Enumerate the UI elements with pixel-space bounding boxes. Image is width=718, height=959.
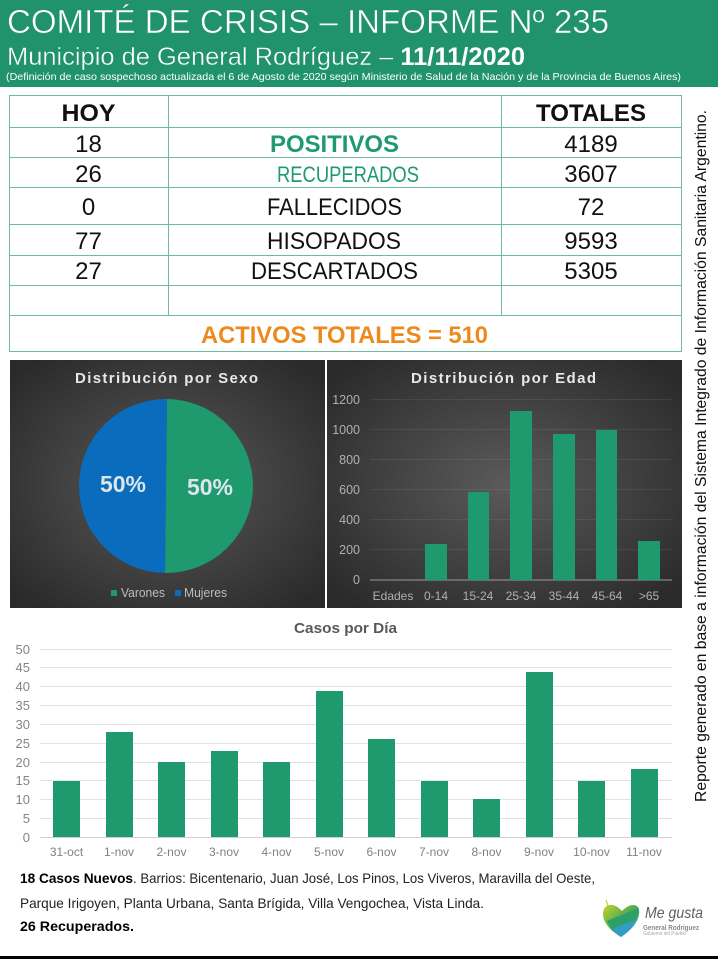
label: mujeres share: 50% [100, 471, 146, 497]
age categories: >65 [639, 589, 660, 603]
case definition note: (Definición de caso sospechoso actualizada el 6 de Agosto de 2020 según Ministerio de Salud de la Nación y de la Provincia de Buenos Aires) [6, 71, 681, 83]
age categories: 25-34 [506, 589, 537, 603]
active totals: ACTIVOS TOTALES = 510 [201, 322, 488, 349]
logo: me gusta general rodríguez: Me gusta [645, 905, 703, 922]
daily categories: 2-nov [156, 845, 187, 859]
age axis values: 1200 [332, 393, 360, 407]
daily bars [53, 672, 658, 837]
logo: me gusta general rodríguez: General Rodríguez [643, 925, 699, 932]
daily axis values: 10 [16, 792, 30, 807]
age axis values: 1000 [332, 423, 360, 437]
panel: distribution by age [327, 360, 682, 608]
daily axis values: 25 [16, 736, 30, 751]
row: recuperados [75, 161, 618, 188]
new cases summary: . Barrios: Bicentenario, Juan José, Los Pinos, Los Viveros, Maravilla del Oeste, [133, 870, 595, 886]
daily categories: 10-nov [573, 845, 610, 859]
daily axis values: 30 [16, 717, 30, 732]
row: positivos [75, 131, 618, 158]
age axis values: 0 [353, 573, 360, 587]
title: COMITÉ DE CRISIS – INFORME Nº 235 [7, 3, 609, 40]
daily axis values: 50 [16, 642, 30, 657]
pie chart [79, 399, 253, 573]
row: recuperados: RECUPERADOS [277, 162, 419, 187]
daily categories: 9-nov [524, 845, 554, 859]
row: hisopados: HISOPADOS [267, 228, 401, 255]
daily categories: 5-nov [314, 845, 344, 859]
subtitle: Municipio de General Rodríguez – 11/11/2020 [7, 43, 525, 71]
daily categories: 11-nov [626, 845, 662, 859]
new cases summary: Parque Irigoyen, Planta Urbana, Santa Brígida, Villa Vengochea, Vista Linda. [20, 895, 484, 911]
daily axis values: 5 [23, 811, 30, 826]
row: positivos: POSITIVOS [270, 131, 399, 158]
icon: heart [603, 900, 639, 937]
row: descartados: 5305 [564, 258, 618, 285]
heading: sex chart: Distribución por Sexo [75, 370, 258, 387]
heading: age chart: Distribución por Edad [411, 370, 596, 387]
daily axis values: 0 [23, 830, 30, 845]
row: hisopados: 9593 [564, 228, 618, 255]
row: descartados [75, 258, 618, 285]
age categories: 35-44 [549, 589, 580, 603]
age categories: Edades [373, 589, 413, 603]
age bars [425, 411, 660, 580]
panel: distribution by sex [10, 360, 325, 608]
age axis values: 200 [339, 543, 360, 557]
age categories: 45-64 [592, 589, 623, 603]
daily axis values: 20 [16, 755, 30, 770]
daily categories: 3-nov [209, 845, 239, 859]
row: fallecidos: 0 [82, 194, 95, 221]
row: recuperados: 26 [75, 161, 102, 188]
age axis values: 800 [339, 453, 360, 467]
row: hisopados [75, 228, 618, 255]
daily categories [50, 845, 662, 859]
daily axis values [16, 642, 30, 845]
daily categories: 4-nov [261, 845, 292, 859]
heading: cases chart: Casos por Día [294, 620, 398, 637]
logo: me gusta general rodríguez: Gobierno del Pueblo [643, 931, 686, 937]
row: hisopados: 77 [75, 228, 102, 255]
row: fallecidos [82, 194, 604, 221]
new cases summary: 18 Casos Nuevos [20, 870, 133, 886]
panel: cases per day [16, 620, 672, 859]
row: descartados: DESCARTADOS [251, 258, 418, 285]
age categories [373, 589, 660, 603]
legend [111, 586, 227, 600]
row: fallecidos: FALLECIDOS [267, 194, 402, 221]
row: fallecidos: 72 [578, 194, 604, 221]
row: descartados: 27 [75, 258, 102, 285]
age axis values [332, 393, 360, 587]
daily categories: 7-nov [419, 845, 449, 859]
new cases summary: 26 Recuperados. [20, 918, 134, 934]
logo: me gusta general rodríguez [603, 900, 703, 937]
daily axis values: 35 [16, 698, 30, 713]
new cases summary [20, 870, 595, 934]
row: positivos: 4189 [564, 131, 618, 158]
age categories: 0-14 [424, 589, 448, 603]
column heading: hoy: HOY [62, 100, 116, 127]
statistics table [10, 96, 682, 352]
daily categories: 31-oct [50, 845, 84, 859]
header banner [0, 0, 718, 87]
daily categories: 6-nov [366, 845, 397, 859]
daily axis values: 40 [16, 679, 30, 694]
row: recuperados: 3607 [564, 161, 618, 188]
age axis values: 400 [339, 513, 360, 527]
legend: Varones [121, 586, 165, 600]
daily axis values: 45 [16, 660, 30, 675]
legend: Mujeres [184, 586, 227, 600]
age categories: 15-24 [463, 589, 494, 603]
label: varones share: 50% [187, 474, 233, 500]
daily categories: 1-nov [104, 845, 134, 859]
vertical source note: Reporte generado en base a información del Sistema Integrado de Información Sanitaria Argentino. [693, 110, 710, 802]
daily axis values: 15 [16, 773, 30, 788]
column heading: totales: TOTALES [536, 100, 646, 127]
daily categories: 8-nov [471, 845, 502, 859]
age axis values: 600 [339, 483, 360, 497]
row: positivos: 18 [75, 131, 102, 158]
